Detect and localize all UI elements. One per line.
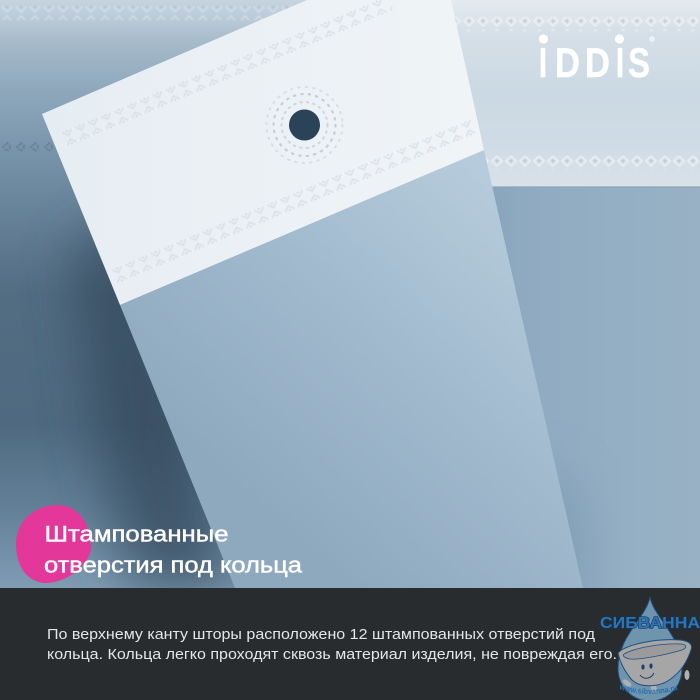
- icon: water drop: [618, 597, 682, 700]
- logo: iDDiS: S: [628, 39, 650, 86]
- dark caption panel: [0, 588, 700, 700]
- logo: iDDiS: [539, 34, 655, 86]
- logo: iDDiS: I: [539, 39, 547, 86]
- embroidered band: top left: [0, 6, 320, 20]
- pink accent blob: [16, 505, 91, 583]
- photo background: left curtain layer: [0, 0, 460, 590]
- embroidered band: lower hem: [110, 119, 477, 283]
- embroidered band: lower right: [470, 156, 700, 170]
- logo: iDDiS: D: [555, 39, 580, 86]
- front curtain strip: white hem: [42, 0, 484, 305]
- stamped hole: [289, 110, 320, 140]
- logo: iDDiS: I: [616, 39, 624, 86]
- front curtain strip: translucent part: [120, 150, 583, 588]
- watermark url: www.sibvanna.ru: [620, 685, 678, 694]
- caption text: кольца. Кольца легко проходят сквозь материал изделия, не повреждая его.: [47, 646, 617, 663]
- caption text: По верхнему канту шторы расположено 12 штампованных отверстий под: [47, 626, 595, 643]
- logo: iDDiS: D: [585, 39, 610, 86]
- watermark: Сибванна: [600, 596, 700, 700]
- heading: [44, 522, 303, 578]
- icon: smiling bathtub: [618, 640, 692, 695]
- embroidered band: upper hem: [60, 0, 393, 146]
- heading: отверстия под кольца: [44, 552, 303, 578]
- watermark wordmark: СИБВАННА: [600, 615, 700, 632]
- heading: Штампованные: [44, 522, 229, 546]
- embroidered band: left, behind strip: [0, 140, 56, 154]
- stamped ring around hole: [266, 87, 342, 163]
- caption text: [47, 626, 617, 663]
- embroidered band: top right: [450, 17, 700, 31]
- photo background: right curtain layer: [440, 0, 700, 650]
